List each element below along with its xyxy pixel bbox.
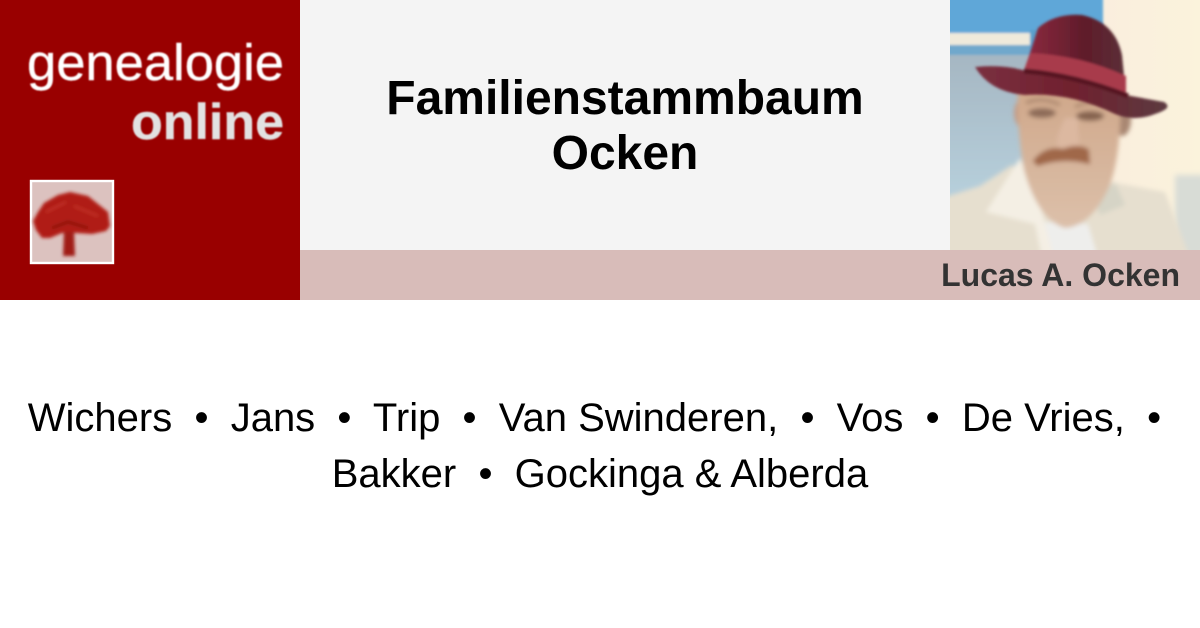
title: Familienstammbaum [386,72,864,125]
panel: logo [0,0,300,300]
icon: tree [31,181,113,263]
panel: title background [300,0,950,250]
title: Ocken [552,127,698,180]
photo: man with red hat [950,0,1200,250]
author name: Lucas A. Ocken [941,257,1180,293]
logo wordmark: genealogie: genealogie [27,34,284,91]
logo wordmark: online: online [131,94,284,150]
title [386,72,864,180]
panel: author band [300,250,1200,300]
surname list: Wichers • Jans • Trip • Van Swinderen, • Vos • De Vries, • Bakker • Gockinga & Alberda [28,396,1172,496]
